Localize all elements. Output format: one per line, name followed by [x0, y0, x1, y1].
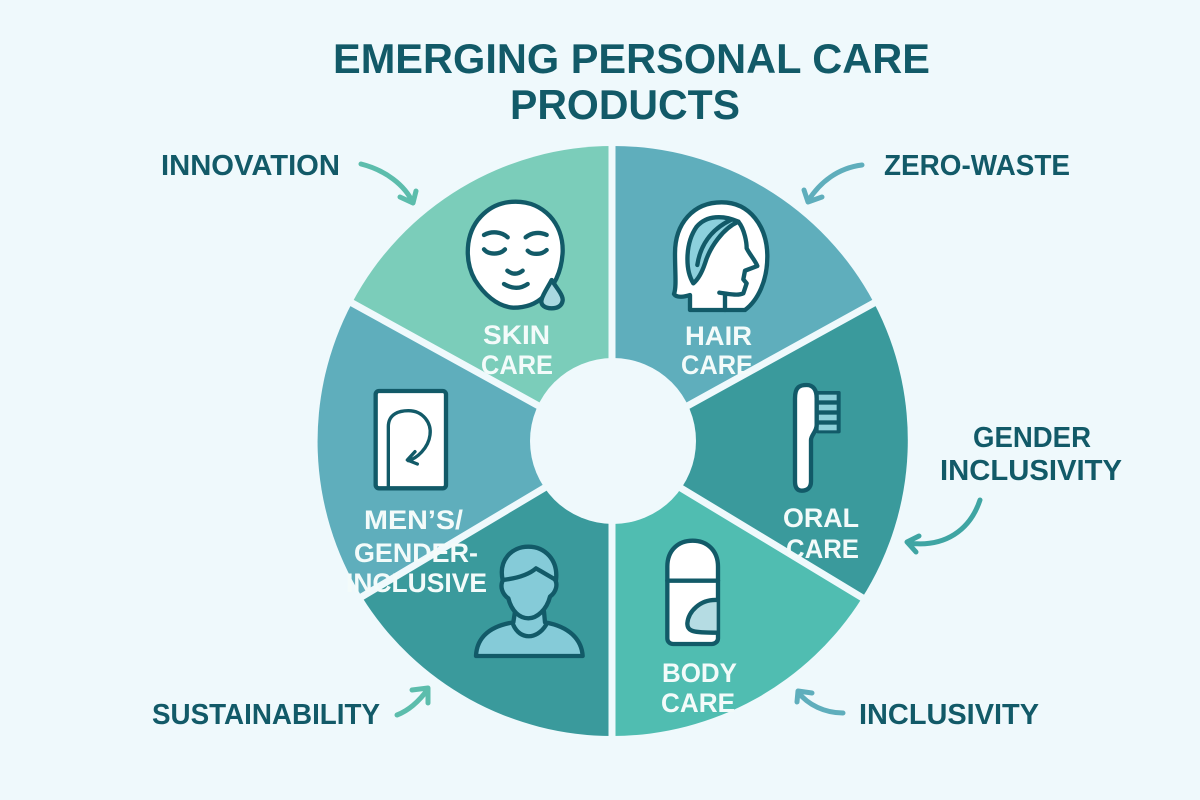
segment: body care: [613, 447, 862, 736]
callout: innovation: INNOVATION: [161, 150, 340, 182]
label: oral care: ORAL: [783, 503, 859, 533]
callout: gender inclusivity: GENDER: [973, 422, 1091, 454]
label: skin care: [481, 320, 553, 380]
label: men's gender-inclusive: GENDER-: [354, 538, 478, 568]
icon: face with droplet: [468, 202, 563, 308]
arrow: zero-waste: [804, 165, 862, 202]
label: skin care: SKIN: [483, 320, 550, 350]
icon: hair profile: [674, 202, 767, 310]
label: hair care: [681, 321, 753, 380]
segment: hair care: [613, 146, 874, 447]
label: oral care: CARE: [786, 534, 859, 564]
segment: skin care: [352, 146, 613, 447]
callout: gender inclusivity: INCLUSIVITY: [940, 455, 1122, 487]
label: skin care: CARE: [481, 350, 553, 380]
arrow: innovation: [361, 164, 416, 203]
label: oral care: [783, 503, 859, 564]
label: body care: [661, 658, 737, 718]
label: men's gender-inclusive: [346, 505, 487, 598]
title: [333, 35, 930, 128]
label: body care: BODY: [662, 658, 737, 688]
title: EMERGING PERSONAL CARE: [333, 35, 930, 82]
icon: person bust: [476, 547, 583, 656]
icon: refill card with arrow: [376, 391, 446, 488]
title: PRODUCTS: [510, 81, 740, 128]
segment: men's gender-inclusive: [318, 303, 613, 597]
donut wheel: [318, 140, 908, 742]
label: body care: CARE: [661, 688, 735, 718]
arrow: sustainability: [397, 688, 428, 715]
segment: sustainability person: [362, 447, 613, 736]
label: men's gender-inclusive: MEN’S/: [364, 505, 464, 535]
callout: inclusivity: INCLUSIVITY: [859, 699, 1039, 731]
arrow: inclusivity: [797, 691, 843, 713]
callout: gender inclusivity: [940, 422, 1122, 487]
callout: zero-waste: ZERO-WASTE: [884, 150, 1070, 182]
arrow: gender inclusivity: [907, 500, 980, 552]
callout: sustainability: SUSTAINABILITY: [152, 699, 380, 731]
label: hair care: HAIR: [685, 321, 752, 351]
segment: oral care: [613, 303, 908, 598]
label: men's gender-inclusive: INCLUSIVE: [346, 568, 487, 598]
icon: toothbrush: [795, 385, 841, 491]
label: hair care: CARE: [681, 350, 753, 380]
icon: roll-on deodorant: [667, 541, 718, 644]
